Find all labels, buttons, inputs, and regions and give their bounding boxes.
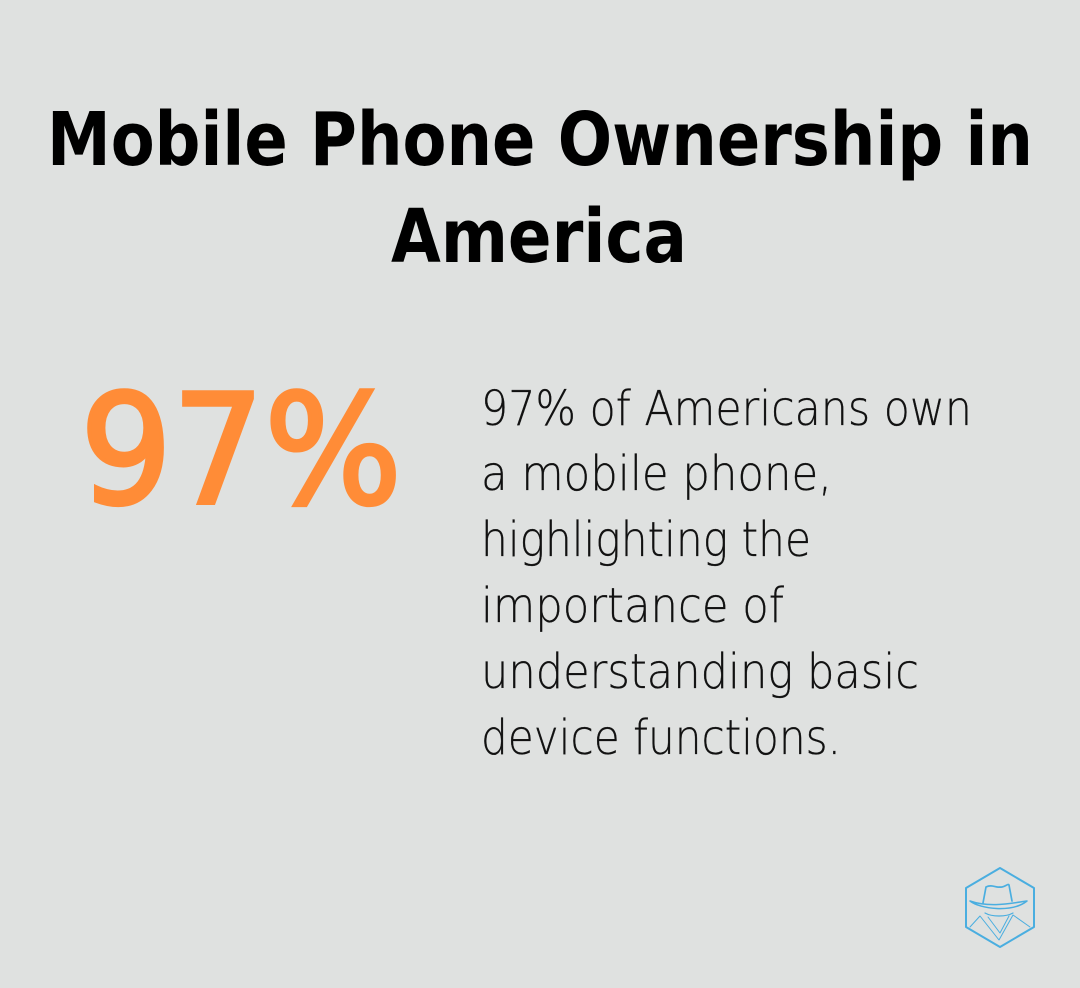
description text: highlighting the (481, 512, 811, 568)
title (47, 97, 1033, 280)
description text: importance of (481, 578, 784, 634)
description text: a mobile phone, (481, 446, 832, 502)
big statistic: 97%: 97% (80, 362, 402, 539)
description text: understanding basic (481, 644, 919, 700)
icon: hexagon logo with hat and coat (966, 868, 1034, 947)
description text: device functions. (481, 710, 841, 766)
description text: 97% of Americans own (481, 381, 972, 437)
description text (481, 381, 972, 766)
title: America (391, 194, 687, 280)
